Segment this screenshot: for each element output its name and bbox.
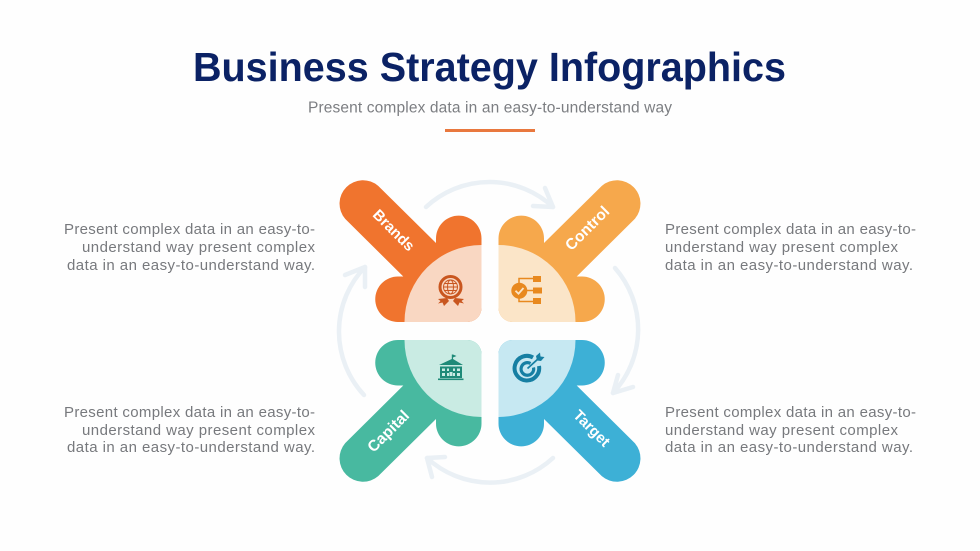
title underline	[445, 129, 535, 132]
text block: top left: Present complex data in an easy-to-	[64, 221, 315, 238]
text block: bottom right	[665, 404, 916, 456]
text block: top left: data in an easy-to-understand way.	[67, 257, 315, 274]
arrow: right	[613, 268, 638, 393]
label: Target: Target	[570, 407, 613, 450]
text block: bottom left: data in an easy-to-understand way.	[67, 439, 315, 456]
text block: bottom right: Present complex data in an easy-to-	[665, 404, 916, 421]
text block: bottom right: data in an easy-to-understand way.	[665, 439, 913, 456]
text block: top right: understand way present complex	[665, 239, 898, 256]
subtitle: Present complex data in an easy-to-understand way	[308, 100, 672, 116]
label: Control: Control	[562, 203, 613, 254]
text block: top right: data in an easy-to-understand way.	[665, 257, 913, 274]
label: Capital: Capital	[364, 407, 413, 456]
panel: capital arrow	[340, 340, 482, 482]
panel: control arrow	[498, 180, 640, 322]
text block: top left	[64, 221, 316, 274]
icon: target with arrow	[515, 352, 544, 380]
text block: bottom left: Present complex data in an easy-to-	[64, 404, 315, 421]
panel: target arrow	[498, 340, 640, 482]
text block: top right	[665, 221, 916, 274]
arrow: bottom	[427, 457, 553, 483]
cycle arrows	[339, 182, 638, 483]
arrow: top	[426, 182, 553, 207]
title: Business Strategy Infographics	[193, 44, 786, 90]
icon: process flow check	[511, 276, 542, 304]
arrow: left	[339, 267, 365, 395]
text block: bottom left: understand way present complex	[82, 422, 316, 439]
panel: brands arrow	[340, 180, 482, 322]
icon: institution building	[438, 354, 464, 380]
text block: bottom left	[64, 404, 316, 456]
label: Brands: Brands	[369, 206, 418, 255]
icon: globe award badge	[438, 276, 464, 306]
text block: top right: Present complex data in an easy-to-	[665, 221, 916, 238]
text block: bottom right: understand way present complex	[665, 422, 898, 439]
text block: top left: understand way present complex	[82, 239, 316, 256]
